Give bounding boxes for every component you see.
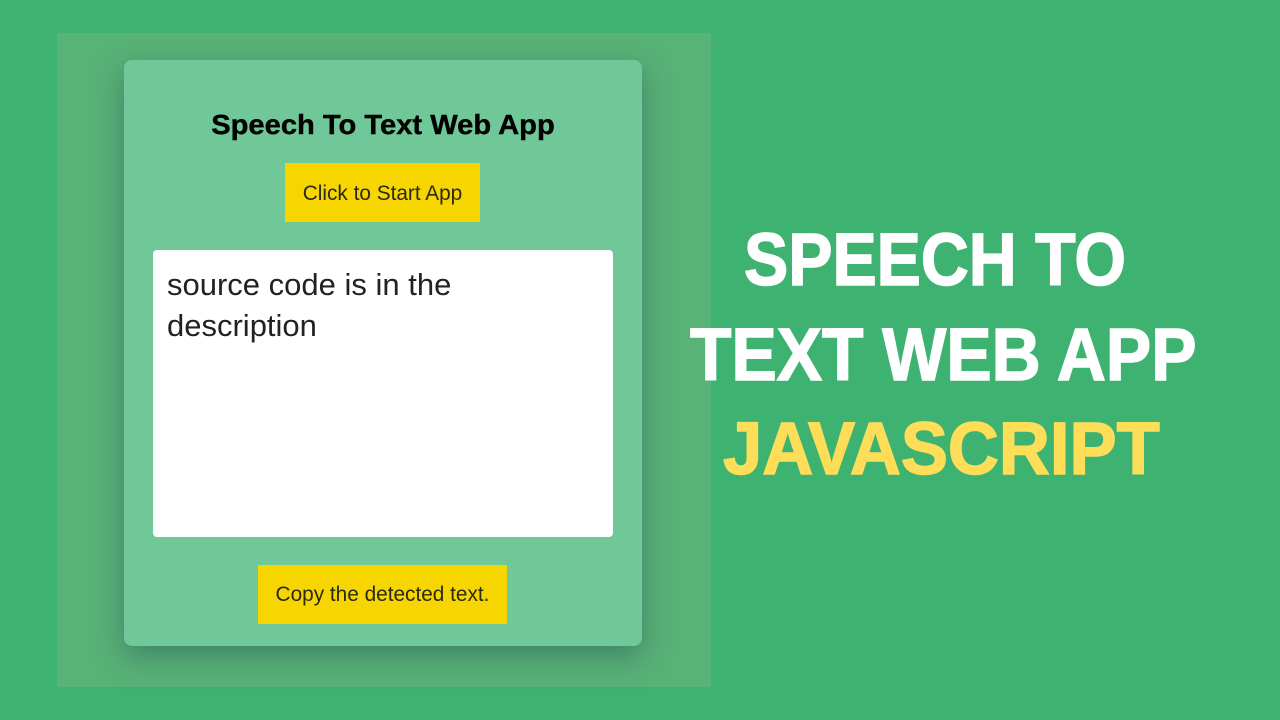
title: javascript: JAVASCRIPT (723, 407, 1160, 490)
title: speech to: SPEECH TO (744, 218, 1126, 301)
heading: app title: Speech To Text Web App (211, 109, 555, 140)
text area content: source code is in the (167, 267, 451, 302)
text area content (167, 267, 451, 343)
button: copy text: Copy the detected text. (276, 583, 489, 606)
button: start app (285, 163, 480, 222)
panel: app card (124, 60, 642, 646)
button: copy text (258, 565, 507, 624)
screenshot backdrop panel (57, 33, 711, 687)
button: start app: Click to Start App (303, 182, 462, 205)
text area (153, 250, 613, 537)
title: text web app: TEXT WEB APP (690, 313, 1196, 396)
text area content: description (167, 308, 317, 343)
